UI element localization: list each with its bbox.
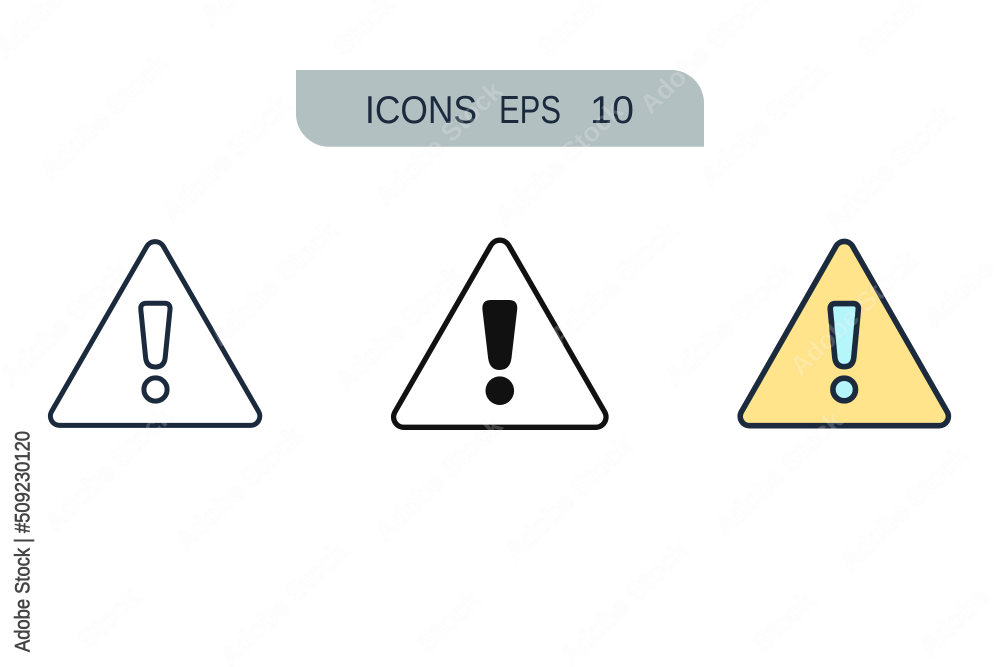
- icon: coloured warning triangle: [740, 241, 948, 426]
- watermark pattern: Adobe Stock: [204, 215, 344, 352]
- banner title: EPS: [499, 89, 561, 132]
- exclamation mark dot: [833, 378, 856, 401]
- triangle outline: [394, 240, 606, 427]
- triangle outline: [50, 242, 260, 425]
- exclamation mark bar: [830, 304, 858, 367]
- watermark pattern: Adobe Stock: [489, 95, 629, 232]
- watermark pattern: Adobe: [913, 582, 994, 661]
- banner title: 10: [590, 89, 634, 132]
- watermark pattern: Stock: [412, 585, 486, 658]
- exclamation mark dot: [144, 378, 167, 401]
- watermark pattern: Adobe Stock: [169, 420, 309, 557]
- watermark pattern: Adobe Stock: [329, 260, 469, 397]
- watermark pattern: Adobe Stock: [369, 75, 509, 212]
- watermark pattern: Adobe Stock: [834, 440, 974, 577]
- icon: solid warning triangle: [394, 240, 606, 427]
- banner shape: [296, 70, 704, 147]
- watermark pattern: Adobe Stock: [369, 410, 509, 547]
- watermark pattern: Adobe Stock: [694, 55, 834, 192]
- watermark pattern: Adobe Stock: [544, 215, 684, 352]
- exclamation mark bar: [482, 300, 517, 370]
- watermark pattern: Stock: [72, 582, 146, 655]
- banner title: [365, 89, 634, 132]
- watermark pattern: Adobe Stock: [784, 245, 924, 382]
- banner: icons eps 10: [296, 70, 704, 147]
- icon: outline warning triangle: [50, 242, 260, 425]
- watermark pattern: Adobe Stock: [819, 100, 959, 237]
- triangle filled: [740, 241, 948, 426]
- watermark pattern: Adobe Stock: [659, 255, 799, 392]
- exclamation mark bar: [141, 303, 170, 367]
- vertical credit text: Adobe Stock | #509230120: [12, 431, 34, 652]
- watermark pattern: Adobe Stock: [156, 90, 296, 227]
- watermark pattern: Adobe: [918, 254, 999, 333]
- banner title: ICONS: [365, 89, 477, 132]
- watermark pattern: Stock: [747, 585, 821, 658]
- watermark pattern: Adobe Stock: [39, 400, 179, 537]
- watermark pattern: Adobe Stock: [34, 48, 174, 185]
- exclamation mark dot: [486, 376, 514, 405]
- watermark pattern: Adobe Stock: [499, 430, 639, 567]
- watermark pattern: Adobe Stock: [709, 405, 849, 542]
